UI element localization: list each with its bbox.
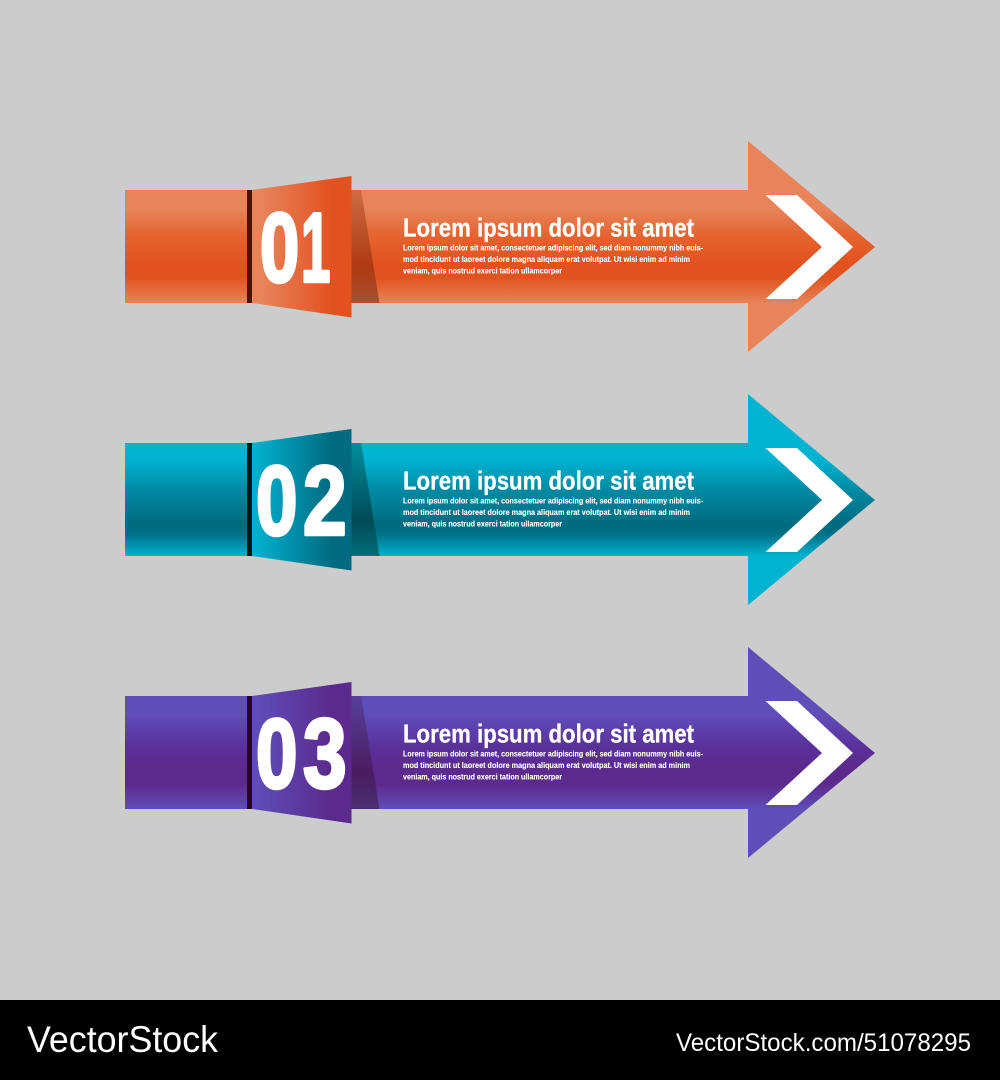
number panel [252, 682, 352, 824]
chevron icon [766, 195, 853, 299]
fold shadow [351, 696, 380, 809]
number 01: 0 [260, 194, 299, 303]
arrow body [125, 394, 875, 605]
arrow body [125, 141, 875, 352]
body text: mod tincidunt ut laoreet dolore magna aliquam erat volutpat. Ut wisi enim ad minim [403, 254, 690, 264]
body text: veniam, quis nostrud exerci tation ullamcorper [403, 518, 563, 528]
number 03: 3 [303, 699, 347, 808]
arrow 02: teal [125, 394, 875, 605]
number 01 [260, 193, 330, 303]
body text: veniam, quis nostrud exerci tation ullamcorper [403, 772, 563, 782]
fold line [247, 696, 252, 809]
number 03 [256, 699, 347, 809]
number 02 [256, 446, 347, 556]
body text: mod tincidunt ut laoreet dolore magna aliquam erat volutpat. Ut wisi enim ad minim [403, 507, 690, 517]
number 02: 0 [256, 447, 297, 556]
body text [403, 496, 703, 528]
body text: mod tincidunt ut laoreet dolore magna aliquam erat volutpat. Ut wisi enim ad minim [403, 760, 690, 770]
footer bar [0, 1000, 1000, 1080]
footer url: VectorStock.com/51078295 [676, 1029, 971, 1057]
body text [403, 242, 703, 276]
number panel [252, 176, 352, 318]
fold shadow [351, 190, 380, 303]
body text [403, 748, 703, 782]
arrow body [125, 647, 875, 858]
body text: Lorem ipsum dolor sit amet, consectetuer adipiscing elit, sed diam nonummy nibh euis- [403, 496, 703, 506]
chevron icon [766, 448, 853, 552]
body text: Lorem ipsum dolor sit amet, consectetuer adipiscing elit, sed diam nonummy nibh euis- [403, 748, 703, 758]
number panel [252, 429, 352, 570]
fold shadow [351, 443, 380, 556]
heading: Lorem ipsum dolor sit amet [403, 466, 694, 496]
number 01: 1 [301, 193, 330, 303]
footer logo: VectorStock [27, 1019, 218, 1060]
body text: Lorem ipsum dolor sit amet, consectetuer adipiscing elit, sed diam nonummy nibh euis- [403, 242, 703, 252]
fold line [247, 443, 252, 556]
chevron icon [766, 701, 853, 805]
arrow 01: orange [125, 141, 875, 352]
heading: Lorem ipsum dolor sit amet [403, 212, 694, 242]
number 03: 0 [256, 700, 297, 809]
number 02: 2 [303, 446, 347, 555]
fold line [247, 190, 252, 303]
arrow 03: purple [125, 647, 875, 858]
body text: veniam, quis nostrud exerci tation ullamcorper [403, 266, 563, 276]
heading: Lorem ipsum dolor sit amet [403, 718, 694, 748]
